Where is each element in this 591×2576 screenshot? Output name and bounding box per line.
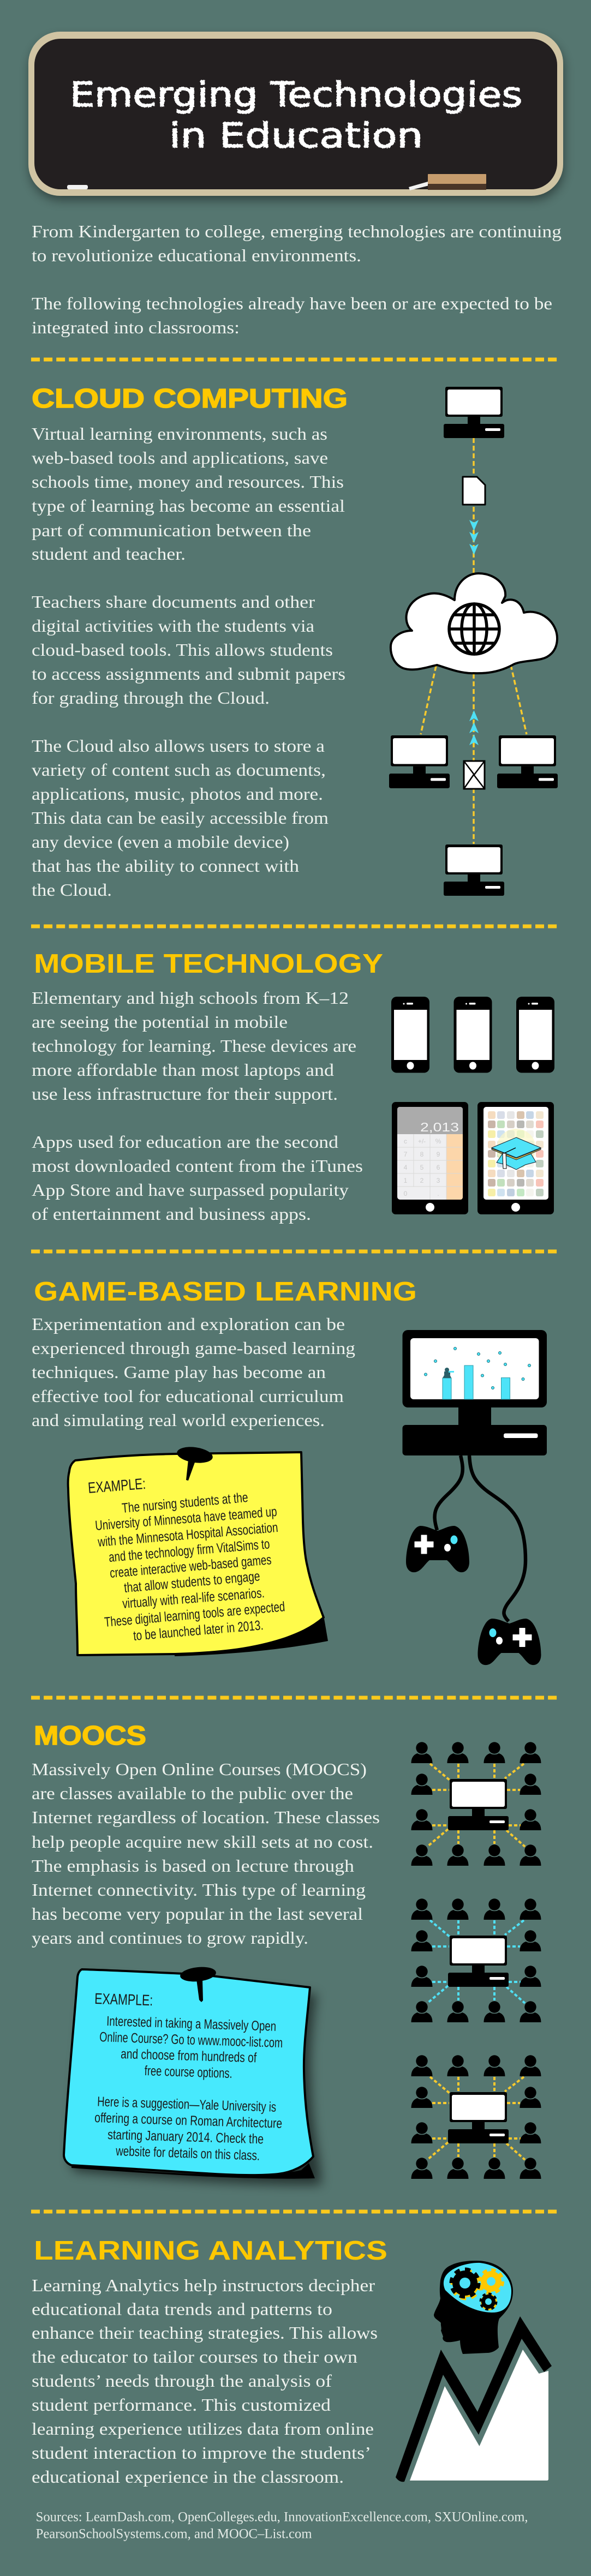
text block: learning analytics: enhance their teaching strategies. This allows [32, 2323, 378, 2343]
intro text: integrated into classrooms: [32, 317, 240, 337]
text block: cloud computing: to access assignments and submit papers [32, 664, 345, 684]
panel: learning analytics [32, 2236, 552, 2541]
text block: learning analytics: student interaction to improve the students’ [32, 2443, 371, 2463]
icon: cloud with globe [391, 573, 557, 673]
calculator keys [404, 1137, 441, 1197]
calculator keys: 9 [437, 1151, 440, 1158]
text block: mobile technology: Apps used for education are the second [32, 1132, 338, 1152]
text block: game-based learning: techniques. Game play has become an [32, 1362, 326, 1382]
text block: moocs [32, 1759, 380, 1948]
icon: head with gears [434, 2261, 513, 2354]
note text: starting January 2014. Check the [108, 2127, 264, 2147]
icon: tablet calculator [392, 1102, 468, 1214]
text block: learning analytics: educational data trends and patterns to [32, 2299, 332, 2319]
text block: mobile technology: technology for learning. These devices are [32, 1036, 356, 1056]
icon: envelope [464, 761, 485, 789]
heading: mobile technology: MOBILE TECHNOLOGY [34, 949, 383, 979]
text block: cloud computing: cloud-based tools. This allows students [32, 640, 333, 660]
text block: cloud computing [32, 424, 345, 900]
note text [94, 1990, 283, 2164]
text block: learning analytics: educational experience in the classroom. [32, 2467, 344, 2487]
text block: cloud computing: This data can be easily accessible from [32, 808, 329, 828]
note text: website for details on this class. [115, 2143, 260, 2164]
gear: large black [451, 2269, 480, 2298]
note text: with the Minnesota Hospital Association [97, 1520, 278, 1550]
text block: game-based learning: effective tool for educational curriculum [32, 1386, 344, 1406]
text block: moocs: Internet regardless of location. These classes [32, 1807, 380, 1827]
calculator keys: 4 [404, 1164, 408, 1171]
text block: learning analytics: student performance. This customized [32, 2395, 331, 2415]
note text: and the technology firm VitalSims to [108, 1536, 270, 1565]
icon: tablet apps with graduation cap [477, 1102, 554, 1214]
text block: learning analytics: the educator to tailor courses to their own [32, 2347, 357, 2367]
calculator keys: 3 [437, 1177, 440, 1184]
pin [176, 1445, 214, 1481]
note text: EXAMPLE: [94, 1990, 153, 2009]
calculator keys: 6 [437, 1164, 440, 1171]
text block: cloud computing: schools time, money and resources. This [32, 472, 344, 492]
sources [36, 2509, 528, 2541]
arrows up [469, 710, 479, 745]
text block: cloud computing: any device (even a mobile device) [32, 832, 289, 852]
text block: moocs: Massively Open Online Courses (MOOCS) [32, 1759, 367, 1779]
text block: cloud computing: for grading through the Cloud. [32, 688, 270, 708]
panel: cloud computing [32, 384, 558, 900]
text block: mobile technology: most downloaded content from the iTunes [32, 1156, 363, 1176]
calculator keys: +/- [418, 1137, 426, 1145]
intro text: The following technologies already have been or are expected to be [32, 293, 552, 313]
calculator keys: 7 [404, 1151, 408, 1158]
text block: mobile technology [32, 988, 363, 1224]
sources: PearsonSchoolSystems.com, and MOOC–List.com [36, 2527, 312, 2541]
calculator keys: 0 [404, 1190, 408, 1197]
text block: moocs: are classes available to the public over the [32, 1783, 353, 1803]
text block: mobile technology: Elementary and high schools from K–12 [32, 988, 349, 1008]
text block: game-based learning: and simulating real world experiences. [32, 1410, 325, 1430]
heading: moocs: MOOCS [34, 1721, 146, 1751]
text block: cloud computing: part of communication between the [32, 520, 311, 540]
calculator display: 2,013 [420, 1120, 459, 1134]
text block: moocs: Internet connectivity. This type of learning [32, 1880, 366, 1900]
icon: phone 3 [516, 997, 554, 1073]
graduation cap [492, 1137, 541, 1170]
text block: learning analytics: students’ needs through the analysis of [32, 2371, 332, 2391]
text block: cloud computing: applications, music, photos and more. [32, 784, 323, 804]
diagram: cloud network [389, 387, 558, 896]
note text: and choose from hundreds of [121, 2046, 257, 2065]
text block: game-based learning [32, 1314, 355, 1430]
calculator keys: % [435, 1137, 441, 1145]
text block: learning analytics: learning experience utilizes data from online [32, 2419, 374, 2439]
note text: Online Course? Go to www.mooc-list.com [99, 2029, 283, 2051]
text block: game-based learning: experienced through game-based learning [32, 1338, 355, 1358]
intro text [32, 221, 562, 337]
arrows down [469, 520, 479, 555]
intro text: From Kindergarten to college, emerging technologies are continuing [32, 221, 562, 241]
text block: cloud computing: variety of content such as documents, [32, 760, 326, 780]
text block: mobile technology: are seeing the potential in mobile [32, 1012, 288, 1032]
heading: learning analytics: LEARNING ANALYTICS [34, 2236, 387, 2266]
panel: moocs [32, 1721, 541, 2185]
note text [87, 1475, 285, 1644]
callout: blue note [64, 1966, 321, 2185]
text block: moocs: years and continues to grow rapidly. [32, 1928, 308, 1948]
text block: learning analytics [32, 2275, 378, 2487]
calculator keys: 2 [420, 1177, 424, 1184]
text block: cloud computing: student and teacher. [32, 544, 186, 564]
panel: mobile technology [32, 949, 554, 1224]
note text: EXAMPLE: [87, 1475, 146, 1496]
icon: bottom computer [444, 844, 504, 896]
text block: mobile technology: more affordable than most laptops and [32, 1060, 334, 1080]
diagram: online class group 1 [411, 1742, 541, 1866]
note text: to be launched later in 2013. [133, 1618, 264, 1644]
calculator keys: 1 [404, 1177, 408, 1184]
calculator keys: 5 [420, 1164, 424, 1171]
icon: phone 2 [454, 997, 492, 1073]
note text: virtually with real-life scenarios. [122, 1585, 265, 1612]
text block: moocs: help people acquire new skill sets at no cost. [32, 1832, 373, 1852]
calculator keys: 8 [420, 1151, 424, 1158]
text block: learning analytics: Learning Analytics help instructors decipher [32, 2275, 375, 2295]
note text: Here is a suggestion—Yale University is [97, 2094, 277, 2115]
intro text: to revolutionize educational environments. [32, 245, 361, 265]
text block: cloud computing: Teachers share documents and other [32, 592, 315, 612]
diagram: online class group 3 [411, 2055, 541, 2179]
calculator keys: . [437, 1190, 439, 1197]
note text: that allow students to engage [123, 1568, 261, 1596]
text block: cloud computing: type of learning has become an essential [32, 496, 345, 516]
right chalk [409, 182, 429, 190]
chart: rising zigzag area [396, 2316, 552, 2482]
icon: right computer [497, 735, 558, 788]
text block: mobile technology: use less infrastructure for their support. [32, 1084, 338, 1104]
sources: Sources: LearnDash.com, OpenColleges.edu, InnovationExcellence.com, SXUOnline.com, [36, 2509, 528, 2525]
icon: left controller [406, 1526, 469, 1572]
text block: cloud computing: the Cloud. [32, 880, 112, 900]
text block: moocs: has become very popular in the last several [32, 1904, 363, 1924]
game screen [425, 1347, 530, 1399]
heading: game-based learning: GAME-BASED LEARNING [34, 1277, 417, 1307]
note text: These digital learning tools are expected [104, 1599, 285, 1630]
gear: small black [481, 2294, 497, 2310]
title: Emerging Technologies [70, 75, 522, 115]
text block: cloud computing: Virtual learning environments, such as [32, 424, 327, 444]
icon: game console [403, 1330, 547, 1621]
text block: cloud computing: that has the ability to connect with [32, 856, 299, 876]
gear: yellow [480, 2270, 503, 2293]
note text: Interested in taking a Massively Open [106, 2014, 277, 2034]
text block: cloud computing: The Cloud also allows users to store a [32, 736, 325, 756]
icon: right controller [478, 1619, 541, 1665]
note text: University of Minnesota have teamed up [94, 1504, 277, 1533]
icon: top computer [444, 387, 504, 438]
diagram: online class group 2 [411, 1898, 541, 2022]
text block: mobile technology: App Store and have surpassed popularity [32, 1180, 349, 1200]
text block: cloud computing: digital activities with the students via [32, 616, 314, 636]
note text: The nursing students at the [121, 1490, 249, 1516]
panel: game-based learning [32, 1277, 547, 1665]
title: in Education [169, 116, 423, 155]
heading: cloud computing: CLOUD COMPUTING [32, 384, 348, 414]
note text: offering a course on Roman Architecture [94, 2110, 283, 2131]
note text: free course options. [144, 2063, 232, 2081]
eraser [428, 174, 486, 190]
callout: yellow note [68, 1445, 328, 1656]
text block: game-based learning: Experimentation and exploration can be [32, 1314, 345, 1334]
calculator keys: c [404, 1137, 407, 1145]
text block: cloud computing: web-based tools and applications, save [32, 448, 328, 468]
title chalkboard [28, 32, 563, 200]
text block: moocs: The emphasis is based on lecture through [32, 1856, 354, 1876]
text block: mobile technology: of entertainment and business apps. [32, 1204, 311, 1224]
title [70, 75, 522, 155]
left chalk [67, 185, 88, 189]
note text: create interactive web-based games [109, 1552, 272, 1581]
icon: document [463, 477, 485, 505]
icon: left computer [389, 735, 450, 788]
controller cables [435, 1455, 526, 1621]
icon: phone 1 [391, 997, 429, 1073]
pin [180, 1966, 217, 2002]
